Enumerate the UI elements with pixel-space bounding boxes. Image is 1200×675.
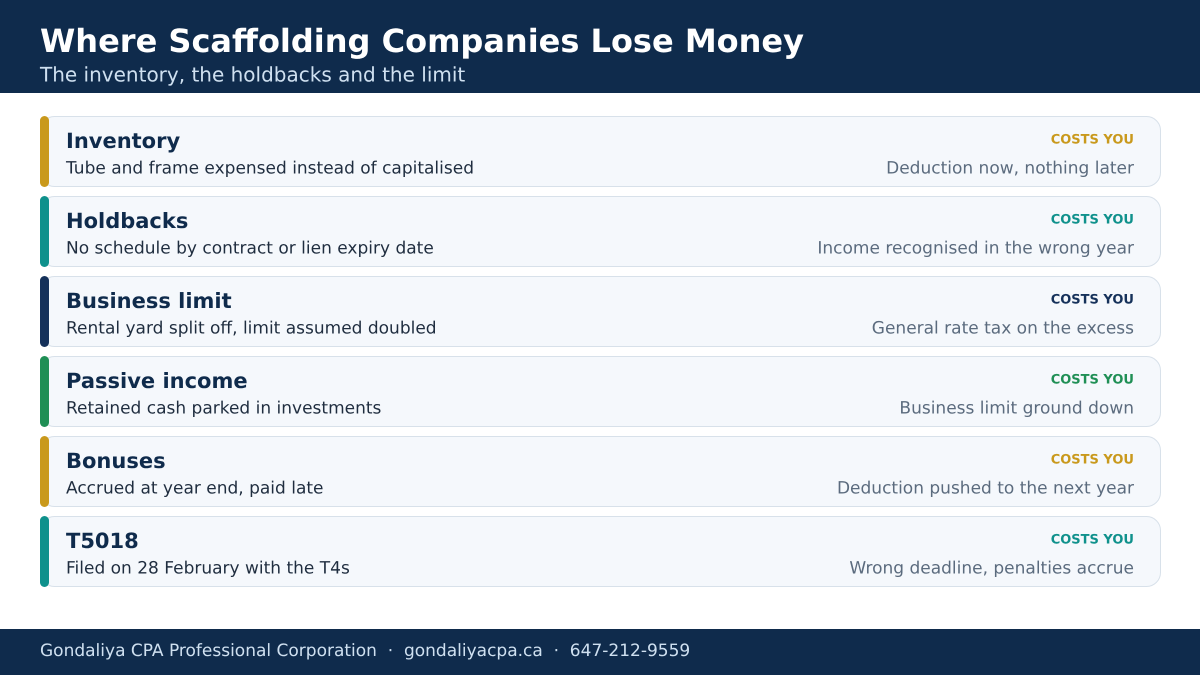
panel: Business limit: Business limit <box>66 289 232 313</box>
panel: Bonuses: Deduction pushed to the next year <box>837 478 1134 498</box>
panel: Inventory <box>40 116 1160 187</box>
panel: Holdbacks: COSTS YOU <box>1051 212 1134 228</box>
panel: Holdbacks: No schedule by contract or lien expiry date <box>66 238 434 258</box>
panel: Passive income: COSTS YOU <box>1051 372 1134 388</box>
title: Where Scaffolding Companies Lose Money <box>40 22 804 60</box>
panel: Passive income: Passive income <box>66 369 248 393</box>
header band <box>0 0 1200 93</box>
panel: Inventory: COSTS YOU <box>1051 132 1134 148</box>
footer band: Gondaliya CPA Professional Corporation · gondaliyacpa.ca · 647-212-9559 <box>40 641 690 661</box>
panel: Bonuses: COSTS YOU <box>1051 452 1134 468</box>
panel: T5018: Wrong deadline, penalties accrue <box>849 558 1134 578</box>
panel: T5018: COSTS YOU <box>1051 532 1134 548</box>
panel: Inventory: Deduction now, nothing later <box>886 158 1134 178</box>
panel: Passive income: Retained cash parked in investments <box>66 398 382 418</box>
panel: T5018 <box>40 516 1160 587</box>
panel: Passive income <box>40 356 1160 427</box>
panel: Inventory: Inventory <box>66 129 180 153</box>
panel: Business limit: COSTS YOU <box>1051 292 1134 308</box>
panel: Holdbacks <box>40 196 1160 267</box>
panel: Business limit: Rental yard split off, limit assumed doubled <box>66 318 437 338</box>
panel: Holdbacks: Income recognised in the wrong year <box>817 238 1134 258</box>
panel: Inventory: Tube and frame expensed instead of capitalised <box>65 158 474 178</box>
panel: Business limit: General rate tax on the excess <box>872 318 1134 338</box>
panel: Bonuses <box>40 436 1160 507</box>
panel: Bonuses: Accrued at year end, paid late <box>66 478 323 498</box>
panel: Passive income: Business limit ground down <box>899 398 1134 418</box>
panel: T5018: Filed on 28 February with the T4s <box>66 558 350 578</box>
panel: T5018: T5018 <box>66 529 139 553</box>
subtitle: The inventory, the holdbacks and the limit <box>39 62 465 86</box>
panel: Business limit <box>40 276 1160 347</box>
panel: Bonuses: Bonuses <box>66 449 166 473</box>
footer band <box>0 629 1200 675</box>
panel: Holdbacks: Holdbacks <box>66 209 188 233</box>
